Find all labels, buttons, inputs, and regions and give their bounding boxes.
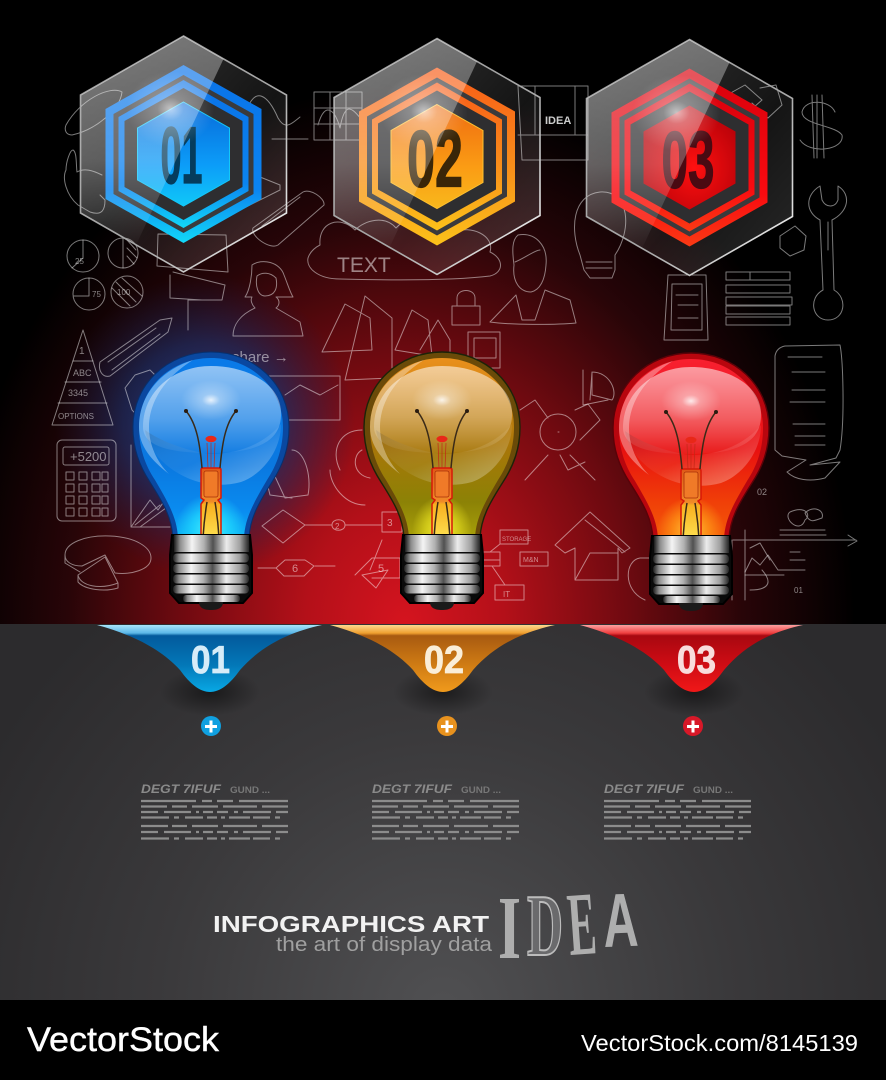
logo: infographics art [213,911,493,956]
icon: red light bulb [613,353,769,611]
text block 2: DEGT 7IFUF [372,782,453,796]
doodle: padlock [452,290,480,325]
doodle: calculator [57,440,116,521]
icon: red plus [683,716,703,736]
doodle: cloud with TEXT [308,217,501,280]
doodle: sketch light bulb [575,192,626,278]
doodle: calculator: +5200 [70,449,107,464]
doodle: storage diagram: M&N [523,557,539,564]
glass hexagon [586,40,792,276]
doodle: pie charts: 25 [75,257,84,266]
doodle: wrench [809,186,847,320]
doodle: share label: share → [232,349,289,366]
text block 2 [372,782,519,838]
doodle: pyramid chart: OPTIONS [58,412,94,421]
footer image id: VectorStock.com/8145139 [581,1030,858,1056]
doodle: documents and flags [157,234,228,330]
tab number: 02 [424,639,464,682]
text block 1: DEGT 7IFUF [141,782,222,796]
ribbon tab 03 [580,625,803,716]
doodle: phone sketch center [468,332,500,368]
doodle: speech-bubble notes [775,345,843,480]
glass hexagon [80,36,286,272]
coloured rings [359,68,515,246]
hand-drawn doodle sketches [52,85,857,600]
doodle: flowchart [258,510,402,588]
doodle: pie charts: 75 [92,290,101,299]
glass hexagon [334,38,540,274]
tab number: 01 [191,639,230,682]
footer brand: VectorStock [27,1021,220,1059]
text block 3: DEGT 7IFUF [604,782,685,796]
doodle: sine graph [246,92,362,140]
icon: blue plus [201,716,221,736]
doodle: storage diagram [482,530,548,600]
text block 3 [604,782,751,838]
hexagon badge 01 [80,36,286,272]
doodle: pyramid chart: 1 [79,346,85,357]
ribbon tab 02 [330,625,555,716]
glass highlight [80,36,224,244]
sketch word IDEA: D [527,878,563,975]
glass highlight [334,38,477,246]
icon: orange plus [437,716,457,736]
doodle: cloud with TEXT: TEXT [337,254,391,277]
doodle: woman avatar [233,262,303,336]
coloured rings [106,65,262,243]
doodle: dial gauge [330,430,395,505]
doodle: clock [628,558,660,600]
glass highlight [586,40,730,248]
doodle: flowchart: 2 [335,522,340,531]
footer bar [0,1000,886,1080]
doodle: pyramid chart: 3345 [68,388,88,398]
coloured rings [612,68,768,246]
doodle: dashboard chart: 01 [794,586,803,595]
doodle: pyramid chart [52,330,113,425]
doodle: hand and pointer [64,150,105,213]
doodle: mobile device [664,275,708,340]
doodle: growth chart [131,445,172,527]
doodle: dashboard chart [732,487,857,600]
doodle: book stack with numbers [322,296,450,380]
text block 2: GUND ... [461,785,501,795]
text block 1: GUND ... [230,785,270,795]
tab number: 03 [677,639,716,682]
sketch word IDEA [498,874,640,978]
doodle: idea document [518,86,588,160]
hexagon badge 03 [586,40,792,276]
doodle: pencil [99,318,172,376]
doodle: pyramid chart: ABC [73,368,92,378]
doodle: monitor [268,376,340,420]
background: dark scene with red glow [0,0,886,625]
doodle: fish outline [65,90,122,135]
doodle: flowchart: 6 [292,563,298,575]
text block 1 [141,782,288,838]
doodle: bar list [726,272,792,325]
doodle: house [555,512,630,580]
doodle: phone [253,191,324,246]
doodle: storage diagram: IT [503,590,510,599]
doodle: pie charts [67,238,143,310]
logo: infographics art: INFOGRAPHICS ART [213,911,489,937]
number 03: 03 [662,116,714,206]
sketch word IDEA: A [602,878,640,964]
text block 3: GUND ... [693,785,733,795]
sketch word IDEA: I [498,879,521,978]
ribbon tab 01 [97,625,322,716]
sketch word IDEA: E [564,874,599,975]
panel: lower dark section [0,624,886,1000]
doodle: flowchart: 5 [378,563,384,575]
doodle: man avatar [490,235,576,324]
hexagon badge 01: 01 [160,111,202,201]
tagline: the art of display data [276,934,493,956]
doodle: target wheel [520,400,600,480]
doodle: pie charts: 100 [117,288,131,297]
icon: blue light bulb [133,352,289,610]
doodle: tablet [220,165,280,220]
doodle: gear [125,370,160,415]
doodle: pie near lamp [583,370,614,405]
doodle: dollar sign [800,95,842,158]
doodle: 3D pie [65,536,151,590]
doodle: idea label: IDEA [545,115,571,127]
doodle: dashboard chart: 02 [757,487,767,497]
doodle: hex nut [780,226,806,256]
number 02: 02 [407,114,463,204]
doodle: storage diagram: STORAGE [502,537,531,543]
icon: amber light bulb [364,352,520,610]
doodle: flowchart: 3 [387,518,393,529]
doodle: 3D cube [727,85,782,125]
hexagon badge 02 [334,38,540,274]
doodle: chart slices [262,450,309,498]
